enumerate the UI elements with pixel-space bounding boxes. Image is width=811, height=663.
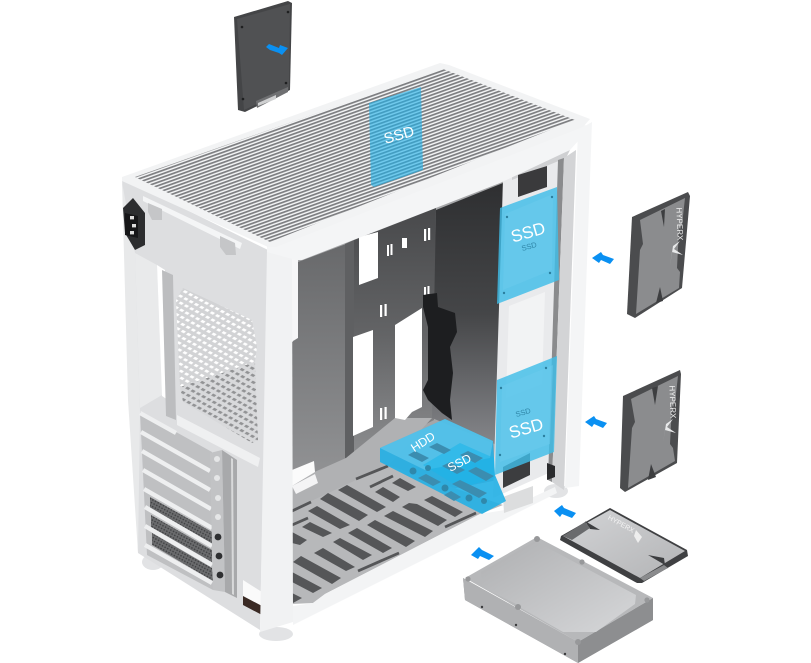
logo: HYPERX	[674, 207, 685, 241]
white glow slot	[292, 461, 315, 486]
floor slots	[292, 478, 463, 603]
label: small SSD: SSD	[514, 406, 532, 419]
inner gray rail	[548, 158, 564, 482]
left frame	[122, 182, 140, 553]
label: SSD: SSD	[382, 123, 416, 148]
arrow: into top	[266, 44, 288, 55]
highlight: top SSD position	[369, 87, 423, 187]
case: floor plate	[292, 465, 503, 604]
motherboard tray left part	[292, 244, 346, 482]
screws	[499, 367, 547, 456]
slot bracket	[177, 415, 260, 598]
highlight: lower side SSD position	[495, 356, 557, 475]
case: drive tray plate	[493, 150, 576, 513]
case: lower front beam	[293, 487, 557, 625]
floor standoffs	[410, 465, 487, 504]
SSD: top, dark side up	[234, 1, 292, 112]
logo: HYPERX	[667, 385, 678, 419]
case: interior back wall	[290, 180, 505, 520]
arrow: lower right SSD	[585, 416, 607, 428]
label: SSD on floor: SSD	[445, 451, 474, 475]
lower wall band	[292, 418, 432, 512]
label: small SSD: SSD	[520, 240, 538, 253]
HDD	[463, 536, 653, 663]
SSD: right upper	[627, 192, 690, 318]
label: HDD: HDD	[408, 429, 438, 455]
top fins	[135, 69, 575, 242]
certification label	[243, 580, 262, 615]
case: left front pillar	[260, 250, 293, 632]
highlight: upper side SSD position	[497, 187, 559, 304]
case: right pillar	[565, 122, 592, 488]
case: top panel	[122, 63, 590, 247]
motherboard tray right part	[354, 208, 436, 461]
arrow: HDD	[471, 547, 494, 560]
tray dark window	[518, 166, 547, 197]
screws	[503, 196, 553, 294]
white bracket slit	[290, 256, 298, 342]
case: top beam	[267, 125, 590, 260]
tray lower hole	[503, 453, 530, 488]
arrow: upper right SSD	[592, 252, 614, 264]
logo: HYPERX	[606, 515, 635, 535]
mesh vent	[176, 288, 258, 443]
mounting screws	[465, 536, 650, 645]
black cable bracket	[423, 293, 457, 420]
white cutouts	[353, 228, 430, 436]
case: back panel	[122, 178, 268, 630]
case: feet	[142, 484, 568, 641]
power inlet	[123, 198, 145, 250]
handle bar	[143, 196, 242, 255]
highlight: floor HDD and SSD position	[380, 419, 506, 514]
floor slots under highlight	[408, 443, 494, 501]
lower bracket	[503, 486, 533, 513]
tray divider	[345, 240, 354, 462]
label: SSD: SSD	[507, 415, 546, 442]
tray inner panel line	[506, 292, 545, 398]
arrow: flat SSD	[554, 505, 576, 518]
right interior wall	[432, 183, 503, 445]
label: SSD: SSD	[509, 219, 548, 246]
SSD: flat	[560, 508, 688, 583]
SSD: right lower	[620, 370, 681, 492]
expansion slots	[140, 412, 213, 590]
opening column	[135, 253, 162, 408]
connector	[256, 87, 288, 108]
